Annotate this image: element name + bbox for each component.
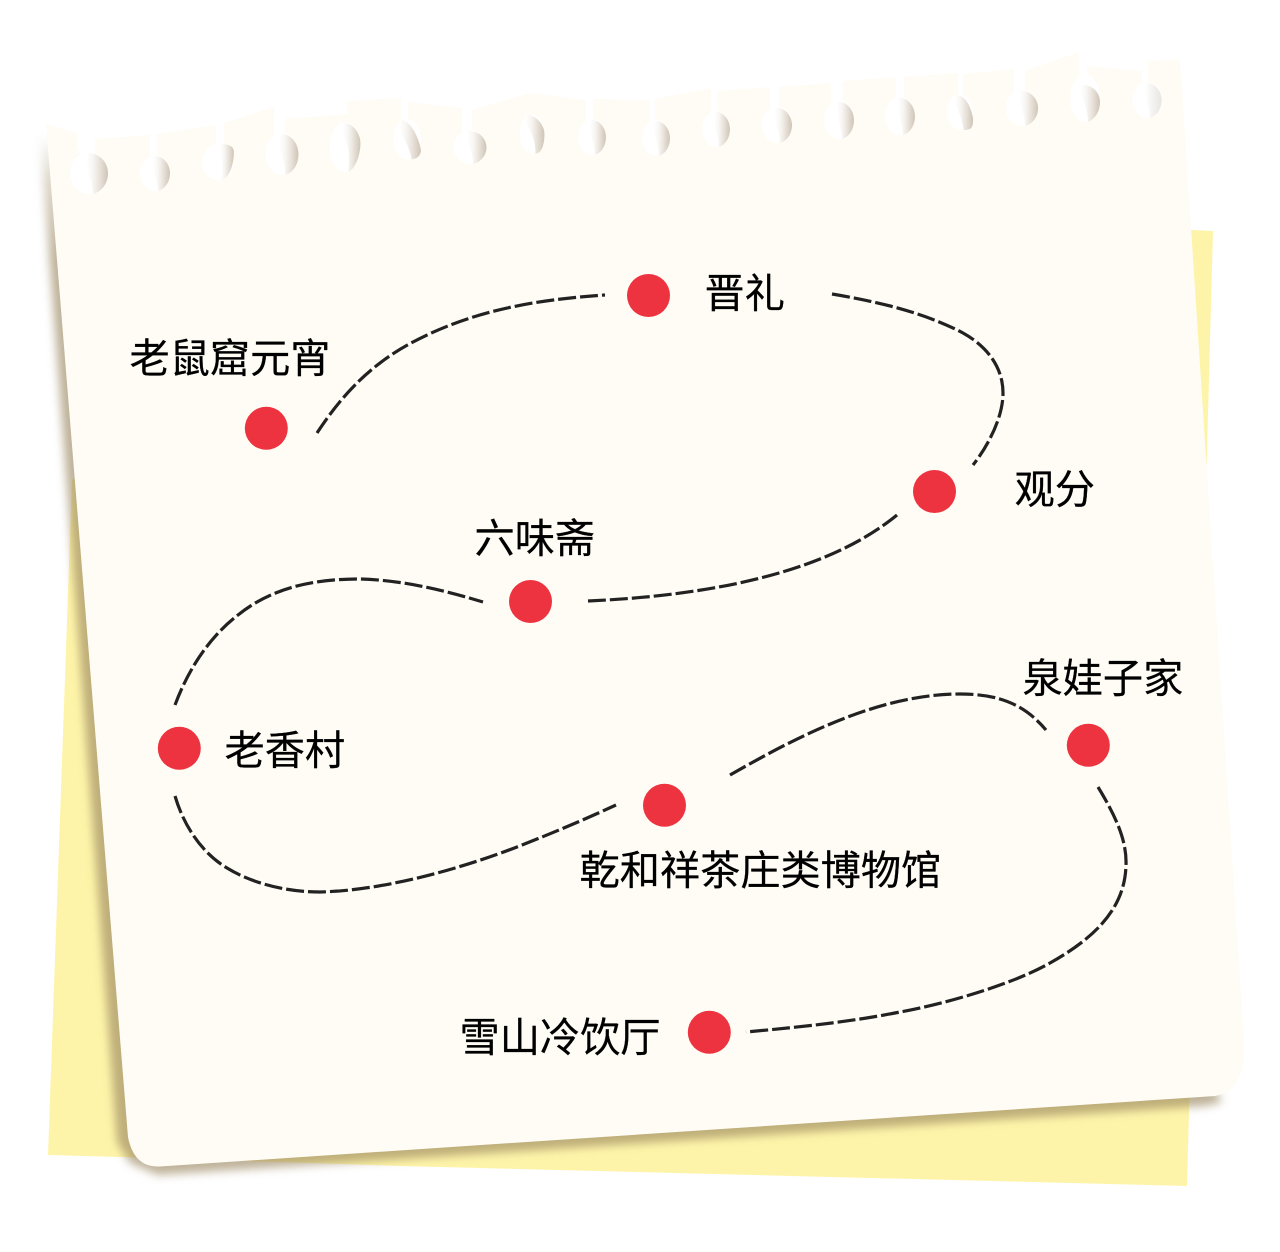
stop: 老鼠窟元宵 bbox=[130, 336, 330, 450]
stop: 晋礼: 晋礼 bbox=[704, 272, 785, 316]
hole 18 bbox=[1132, 82, 1162, 118]
hole 11 bbox=[702, 111, 730, 147]
punched holes bbox=[70, 74, 1162, 194]
hole 5 bbox=[330, 122, 360, 172]
stop: 泉娃子家: 泉娃子家 bbox=[1022, 656, 1183, 702]
stop: 老香村 bbox=[158, 727, 345, 774]
stop: 雪山冷饮厅 bbox=[460, 1011, 731, 1060]
hole 4 bbox=[266, 133, 298, 175]
stop: 六味斋 bbox=[474, 516, 595, 623]
stop: 老香村: 老香村 bbox=[224, 728, 345, 774]
hole 1 bbox=[70, 152, 108, 194]
hole 9 bbox=[578, 119, 606, 155]
hole 16 bbox=[1006, 90, 1038, 126]
hole 13 bbox=[824, 101, 854, 139]
stop: 观分 bbox=[913, 468, 1095, 513]
stop: 观分: 观分 bbox=[1014, 468, 1095, 512]
hole 2 bbox=[140, 155, 170, 191]
paper shadow bbox=[40, 135, 1222, 1175]
stop: 泉娃子家 bbox=[1022, 656, 1183, 767]
stop: 六味斋: 六味斋 bbox=[474, 516, 595, 562]
hole 17 bbox=[1070, 74, 1100, 122]
stop: 乾和祥茶庄类博物馆: 乾和祥茶庄类博物馆 bbox=[580, 848, 941, 894]
hole 10 bbox=[642, 120, 670, 156]
hole 14 bbox=[885, 97, 915, 135]
stop: 老鼠窟元宵: 老鼠窟元宵 bbox=[130, 336, 330, 382]
hole 7 bbox=[454, 130, 486, 164]
stop: 乾和祥茶庄类博物馆 bbox=[580, 784, 941, 894]
hole 6 bbox=[393, 119, 421, 159]
hole 12 bbox=[762, 107, 792, 143]
stop: 雪山冷饮厅: 雪山冷饮厅 bbox=[460, 1016, 660, 1060]
yellow back sheet bbox=[48, 230, 1213, 1186]
stop: 晋礼 bbox=[627, 272, 785, 317]
dashed route bbox=[175, 294, 1126, 1032]
hole 3 bbox=[202, 143, 234, 181]
hole 15 bbox=[947, 94, 973, 130]
hole 8 bbox=[520, 114, 544, 154]
